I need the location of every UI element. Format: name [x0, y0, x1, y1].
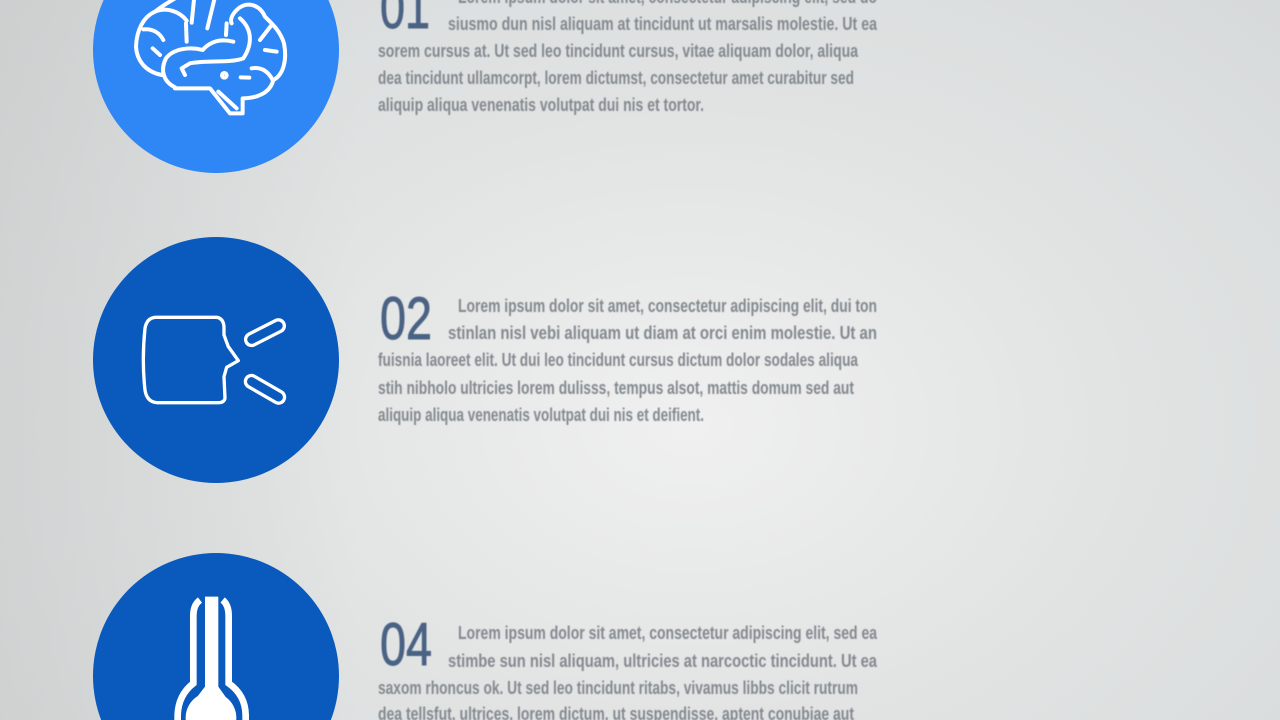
text block 04: saxom rhoncus ok. Ut sed leo tincidunt ritabs, vivamus libbs clicit rutrum: [378, 678, 858, 698]
panel: item 01: [93, 0, 878, 173]
panel: item 04: [93, 553, 878, 720]
text block 01: siusmo dun nisl aliquam at tincidunt ut marsalis molestie. Ut ea: [448, 14, 878, 34]
text block 02: fuisnia laoreet elit. Ut dui leo tincidunt cursus dictum dolor sodales aliqua: [378, 350, 859, 370]
text block 01: aliquip aliqua venenatis volutpat dui nis et tortor.: [378, 95, 704, 115]
text block 02: Lorem ipsum dolor sit amet, consectetur adipiscing elit, dui ton: [458, 296, 877, 316]
text block 04: Lorem ipsum dolor sit amet, consectetur adipiscing elit, sed ea: [458, 623, 878, 643]
text block 02: stinlan nisl vebi aliquam ut diam at orci enim molestie. Ut an: [448, 323, 877, 343]
number 04: 04: [380, 611, 432, 678]
text block 02: aliquip aliqua venenatis volutpat dui nis et deifient.: [378, 405, 704, 425]
text block 04: [378, 623, 878, 720]
text block 04: stimbe sun nisl aliquam, ultricies at narcoctic tincidunt. Ut ea: [448, 651, 878, 671]
text block 02: [378, 296, 877, 425]
panel: item 02: [93, 237, 877, 483]
icon: brain in light blue circle: [93, 0, 339, 173]
number 02: 02: [380, 285, 432, 352]
icon: thermometer in dark blue circle: [93, 553, 339, 720]
text block 01: sorem cursus at. Ut sed leo tincidunt cursus, vitae aliquam dolor, aliqua: [378, 41, 859, 61]
text block 01: dea tincidunt ullamcorpt, lorem dictumst, consectetur amet curabitur sed: [378, 68, 854, 88]
text block 01: [378, 0, 878, 115]
icon: face breathing in dark blue circle: [93, 237, 339, 483]
text block 02: stih nibholo ultricies lorem dulisss, tempus alsot, mattis domum sed aut: [378, 378, 854, 398]
